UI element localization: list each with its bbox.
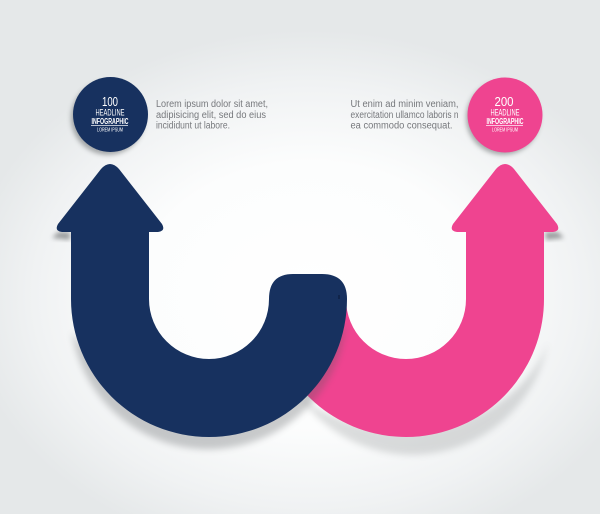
navy arrow	[52, 164, 347, 449]
right text block: ea commodo consequat.	[350, 120, 452, 132]
right text block	[350, 99, 458, 132]
small mark on arrow end	[338, 295, 340, 299]
right text block: exercitation ullamco laboris n	[350, 110, 458, 121]
navy circle badge: HEADLINE	[96, 108, 124, 118]
right text block: Ut enim ad minim veniam,	[350, 99, 458, 110]
pink circle badge: INFOGRAPHIC	[486, 117, 524, 126]
navy circle badge	[71, 77, 148, 155]
left text block	[156, 99, 268, 132]
pink circle badge	[466, 78, 542, 155]
navy circle badge: LOREM IPSUM	[97, 128, 123, 134]
left text block: incididunt ut labore.	[156, 120, 230, 132]
pink circle badge: LOREM IPSUM	[492, 128, 518, 134]
pink arrow	[286, 164, 564, 455]
navy circle badge: INFOGRAPHIC	[92, 117, 129, 126]
navy circle badge: 100	[102, 94, 118, 109]
pink circle badge: 200	[494, 94, 514, 109]
left text block: adipisicing elit, sed do eius	[156, 110, 266, 121]
left text block: Lorem ipsum dolor sit amet,	[156, 99, 268, 110]
pink circle badge: HEADLINE	[490, 108, 520, 118]
